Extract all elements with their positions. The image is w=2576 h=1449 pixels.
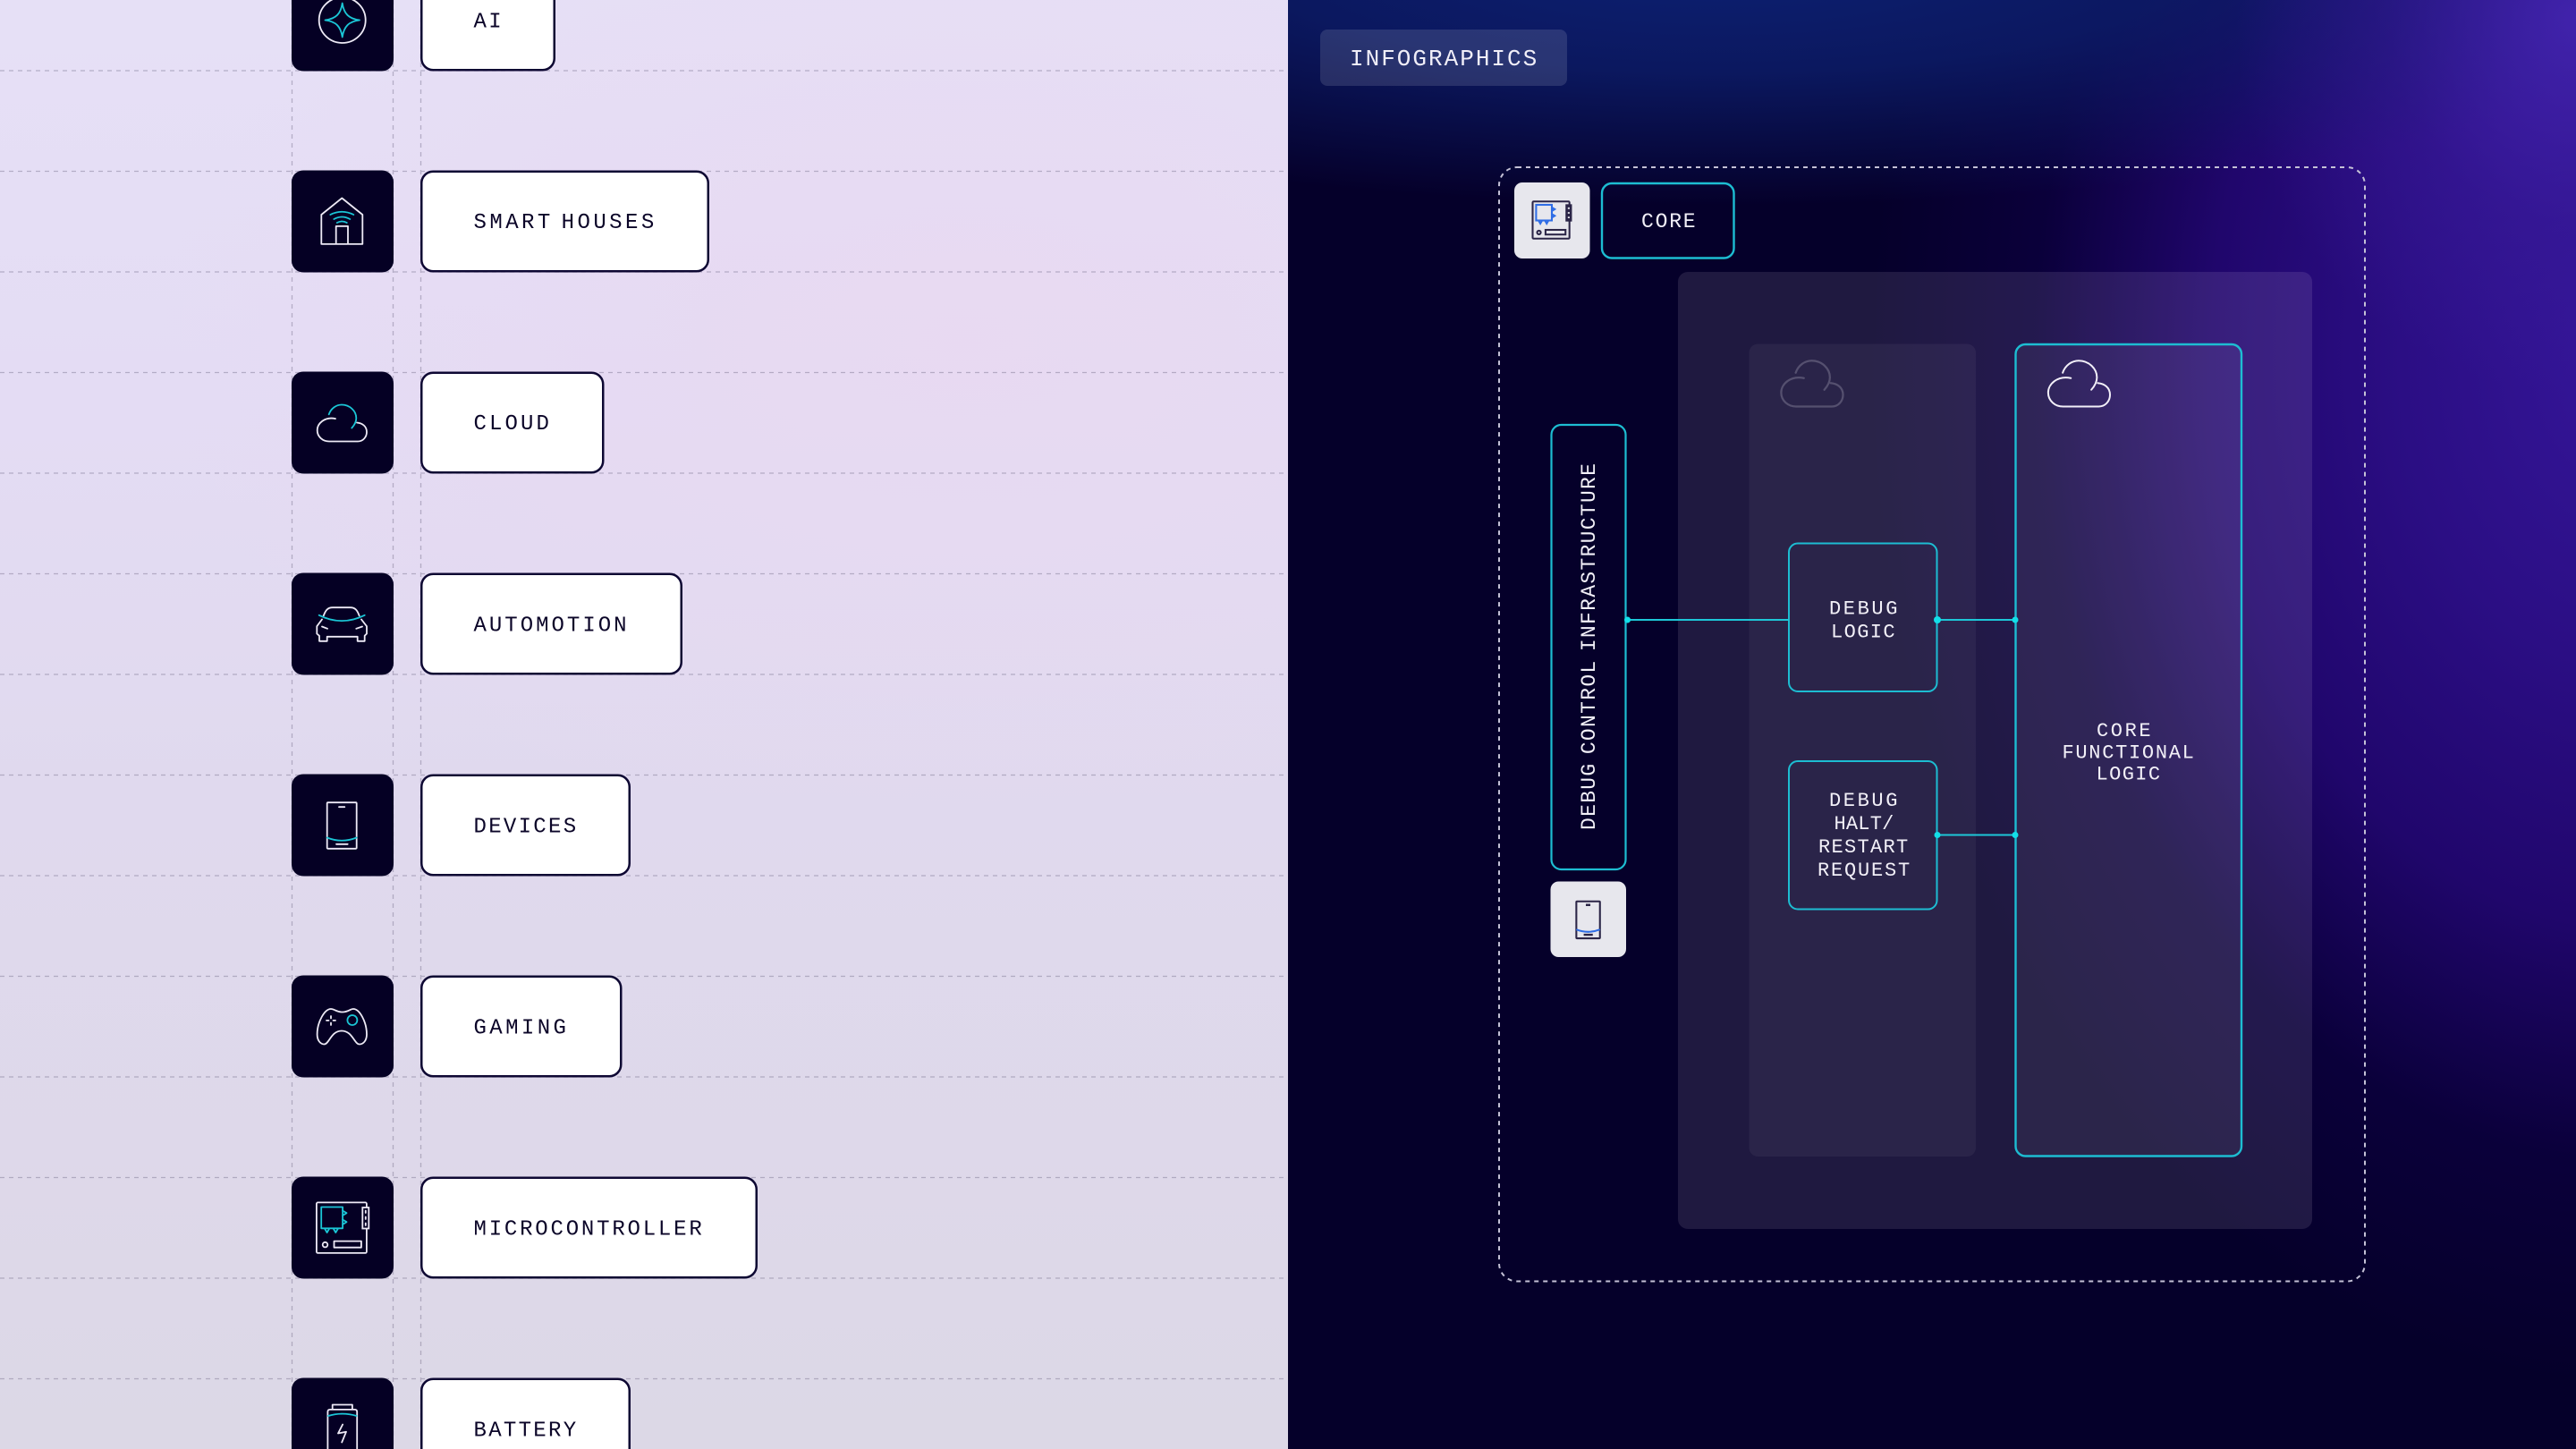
icon: gamepad — [292, 975, 394, 1077]
text: core functional logic — [2063, 720, 2196, 785]
box: debug halt restart request: REQUEST — [1818, 860, 1911, 882]
icon: car — [292, 572, 394, 674]
box: debug control infrastructure — [1551, 425, 1626, 869]
row: AI — [292, 0, 555, 72]
icon: microcontroller board — [292, 1177, 394, 1279]
connector: halt request to core — [1934, 832, 2018, 838]
label: battery: BATTERY — [474, 1419, 578, 1444]
panel: debug column — [1750, 343, 1976, 1157]
icon: cloud — [292, 372, 394, 474]
label: automotion — [421, 574, 682, 674]
label: devices: DEVICES — [474, 816, 578, 839]
connector: debug logic to core — [1934, 616, 2018, 623]
label: core — [1602, 183, 1733, 258]
panel: core group — [1678, 272, 2312, 1229]
icon tile: phone — [1551, 882, 1626, 957]
row: devices — [292, 775, 630, 877]
icon: smart house — [292, 170, 394, 272]
text: core functional logic: FUNCTIONAL — [2063, 742, 2196, 764]
label: microcontroller: MICROCONTROLLER — [474, 1218, 705, 1241]
box: debug halt restart request: DEBUG — [1829, 790, 1900, 812]
label: battery — [421, 1379, 630, 1449]
label: AI — [421, 0, 555, 70]
row: cloud — [292, 372, 603, 474]
box: debug logic — [1789, 544, 1937, 691]
row: automotion — [292, 572, 682, 674]
box: debug logic: DEBUG — [1829, 597, 1900, 621]
row: gaming — [292, 975, 621, 1077]
row: smart houses — [292, 170, 708, 272]
box: debug halt restart request: RESTART — [1818, 836, 1910, 859]
icon: cloud — [2048, 360, 2110, 406]
label: microcontroller — [421, 1178, 757, 1277]
label: cloud: CLOUD — [474, 412, 552, 436]
panel: core functional logic — [2016, 344, 2241, 1156]
icon: AI sparkle — [292, 0, 394, 72]
box: debug halt restart request: HALT/ — [1834, 813, 1894, 835]
label: automotion: AUTOMOTION — [474, 614, 630, 639]
diagram frame: core — [1499, 167, 2365, 1281]
connector: control to debug logic — [1624, 617, 1789, 623]
tag: infographics — [1320, 30, 1567, 86]
icon tile: microcontroller — [1514, 182, 1590, 258]
text: core functional logic: CORE — [2097, 720, 2153, 742]
tag: infographics: INFOGRAPHICS — [1350, 46, 1538, 72]
label: core: CORE — [1641, 210, 1697, 233]
row: microcontroller — [292, 1177, 757, 1279]
box: debug control infrastructure: DEBUG CONTROL INFRASTRUCTURE — [1578, 462, 1601, 830]
box: debug halt restart request — [1789, 761, 1937, 909]
text: core functional logic: LOGIC — [2097, 764, 2162, 785]
label: gaming: GAMING — [474, 1016, 569, 1041]
label: smart houses: SMART HOUSES — [474, 211, 657, 235]
row: battery — [292, 1377, 630, 1449]
label: gaming — [421, 977, 621, 1076]
box: debug logic: LOGIC — [1831, 621, 1896, 644]
label: smart houses — [421, 172, 708, 271]
label: devices — [421, 775, 630, 875]
label: cloud — [421, 373, 603, 472]
icon: battery — [292, 1377, 394, 1449]
icon: phone — [292, 775, 394, 877]
label: AI: AI — [474, 11, 504, 34]
